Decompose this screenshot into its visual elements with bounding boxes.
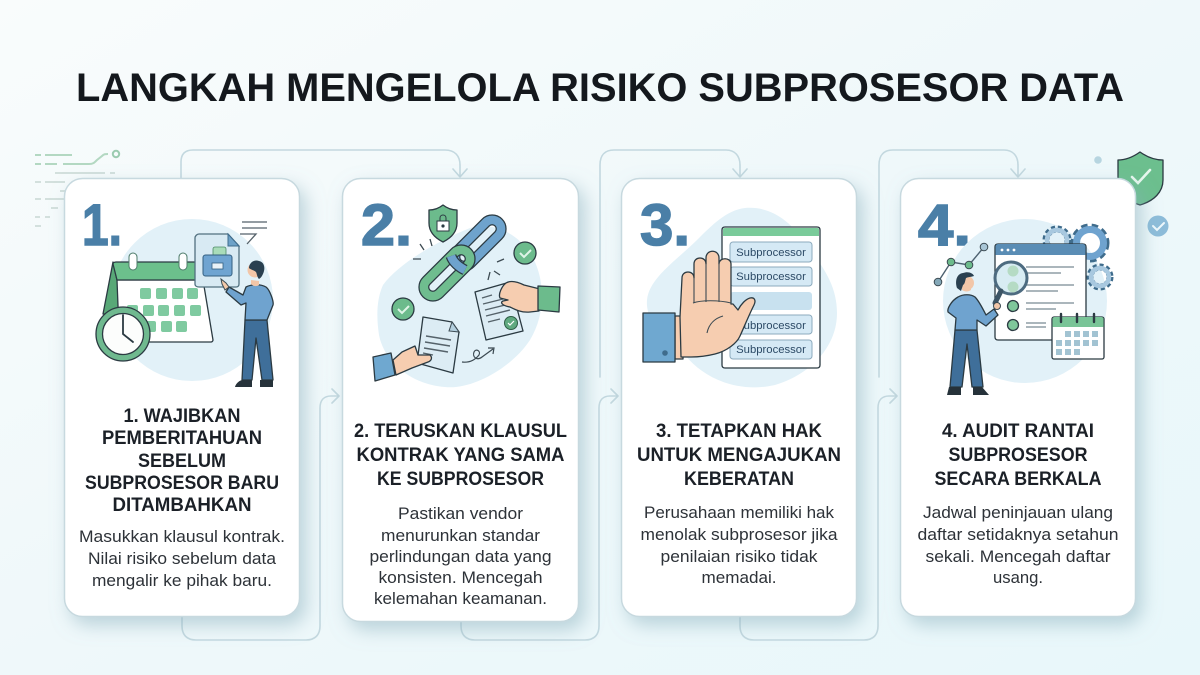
decoration: shield with check [1118,152,1163,205]
step 4 heading: SECARA BERKALA [934,469,1102,490]
arrow: bottom connector 2 to 3 [461,389,618,640]
step 3 description [640,503,838,587]
step 2 heading [354,421,567,490]
step 1 description [79,527,285,590]
panel: step 4 [900,178,1136,616]
step 4 description: usang. [993,568,1043,587]
step 1 heading: SEBELUM [138,451,226,472]
step 3 description: penilaian risiko tidak [660,547,818,566]
step 1 heading: PEMBERITAHUAN [102,428,262,449]
step 4 heading: 4. AUDIT RANTAI [942,421,1094,442]
step 2 heading: KE SUBPROSESOR [377,469,544,490]
panel: step 2 [342,178,578,622]
step 3 heading [637,421,841,490]
illustration: audit window, gears, magnifier, person [934,219,1110,395]
step 2 description: kelemahan keamanan. [374,589,547,608]
step number 3: 3. [640,193,690,258]
illustration: chain link, documents, hands [373,205,560,387]
subprocessor labels: Subprocessor [736,247,806,259]
decoration: small dot [1094,156,1102,164]
step 2 description [370,504,552,608]
step 2 heading: 2. TERUSKAN KLAUSUL [354,421,567,442]
arrow: bottom connector 1 to 2 [182,389,339,640]
illustration: calendar, clock, document, person [96,219,273,387]
illustration: stop hand and subprocessor list [643,208,837,387]
step 1 description: Masukkan klausul kontrak. [79,527,285,546]
panel: step 1 [64,178,300,616]
title: LANGKAH MENGELOLA RISIKO SUBPROSESOR DATA [76,66,1124,110]
step 2 description: perlindungan data yang [370,547,552,566]
step 4 description [918,503,1118,587]
step 3 description: Perusahaan memiliki hak [644,503,835,522]
step 4 heading: SUBPROSESOR [948,445,1088,466]
step 3 description: menolak subprosesor jika [640,525,838,544]
step 1 description: mengalir ke pihak baru. [92,571,272,590]
step number 2: 2. [361,193,412,258]
subprocessor labels: Subprocessor [736,320,806,332]
step number 1: 1. [82,193,122,258]
step 3 heading: UNTUK MENGAJUKAN [637,445,841,466]
step 2 description: menurunkan standar [381,526,540,545]
step 1 heading: DITAMBAHKAN [112,495,252,516]
arrow: bottom connector 3 to 4 [740,389,897,640]
arrow: top connector 2 to 3 [600,150,747,377]
step 2 description: konsisten. Mencegah [378,568,542,587]
subprocessor labels: Subprocessor [736,344,806,356]
step 1 heading [85,406,279,516]
subprocessor labels: Subprocessor [736,271,806,283]
step 4 description: sekali. Mencegah daftar [926,547,1111,566]
step 2 heading: KONTRAK YANG SAMA [356,445,565,466]
step 2 description: Pastikan vendor [398,504,523,523]
decoration: circuit lines [35,151,119,226]
subprocessor labels [736,247,806,356]
step 3 description: memadai. [702,568,776,587]
decoration: blue check badge [1148,216,1168,236]
step 4 description: Jadwal peninjauan ulang [923,503,1113,522]
step 3 heading: KEBERATAN [684,469,794,490]
arrow: top connector 1 to 2 [181,150,467,178]
step 1 description: Nilai risiko sebelum data [88,549,277,568]
panel: step 3 [622,178,856,616]
arrow: top connector 3 to 4 [879,150,1025,377]
step 4 description: daftar setidaknya setahun [918,525,1118,544]
step 3 heading: 3. TETAPKAN HAK [656,421,822,442]
step 1 heading: 1. WAJIBKAN [124,406,240,427]
step 1 heading: SUBPROSESOR BARU [85,473,279,494]
step number 4: 4. [918,193,971,258]
step 4 heading [934,421,1102,490]
